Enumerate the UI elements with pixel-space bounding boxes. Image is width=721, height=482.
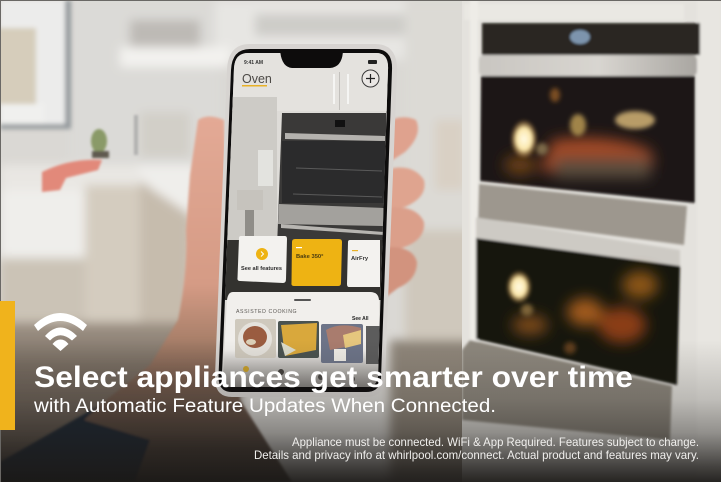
background: wall oven bbox=[462, 0, 721, 482]
disclaimer: Details and privacy info at whirlpool.com/connect. Actual product and features may vary. bbox=[254, 448, 699, 462]
phone screen bbox=[220, 49, 390, 393]
add button bbox=[362, 70, 379, 87]
dark gradient overlay bbox=[0, 340, 721, 482]
card: see all features: See all features bbox=[241, 266, 282, 272]
recipe photo: partial bbox=[366, 326, 380, 364]
card: air fry bbox=[347, 240, 380, 287]
hand holding phone bbox=[0, 116, 425, 482]
notch bbox=[280, 53, 343, 68]
recipe photo: cake bbox=[321, 324, 363, 363]
arm and palm bbox=[14, 116, 292, 482]
subheading: with Automatic Feature Updates When Connected. bbox=[33, 396, 496, 417]
card: see all features bbox=[237, 236, 287, 283]
card: bake 350: Bake 350° bbox=[296, 254, 324, 260]
recipe photo: chicken bbox=[235, 319, 276, 358]
potted plant and towel bbox=[42, 115, 138, 192]
disclaimer bbox=[254, 435, 699, 462]
screen heading: Oven bbox=[242, 72, 272, 86]
status bar time: 9:41 AM bbox=[244, 60, 263, 66]
navigation dots bbox=[243, 366, 355, 382]
phone bezel bbox=[218, 49, 392, 392]
headline: Select appliances get smarter over time bbox=[34, 361, 633, 394]
phone frame bbox=[215, 44, 397, 397]
assisted cooking sheet: See All bbox=[352, 316, 369, 322]
oven photo in app bbox=[220, 53, 390, 393]
kitchen window bbox=[0, 0, 71, 129]
assisted cooking sheet: ASSISTED COOKING bbox=[236, 309, 297, 315]
yellow accent bar bbox=[0, 301, 15, 430]
card: air fry: AirFry bbox=[351, 256, 369, 262]
recipe photo: casserole bbox=[278, 321, 319, 358]
heading underline bbox=[242, 85, 267, 86]
disclaimer: Appliance must be connected. WiFi & App Required. Features subject to change. bbox=[292, 435, 699, 449]
icon: wifi bbox=[34, 313, 87, 351]
card: bake 350 bbox=[291, 239, 342, 286]
status icons bbox=[368, 60, 377, 64]
assisted cooking sheet bbox=[222, 292, 380, 392]
smartphone bbox=[215, 44, 397, 397]
